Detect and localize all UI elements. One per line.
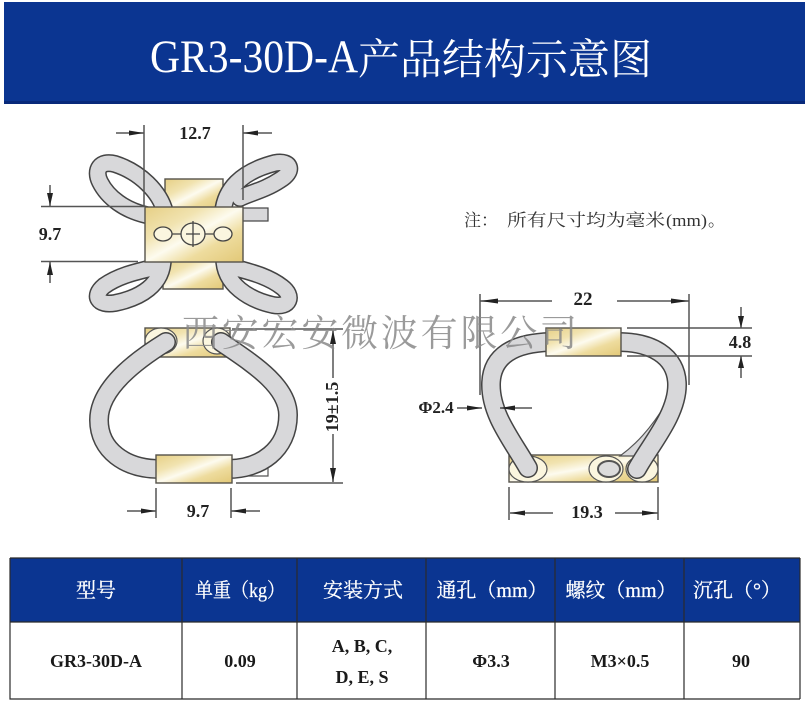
table row: A, B, C, (332, 636, 392, 656)
watermark: 西安宏安微波有限公司 (182, 313, 577, 355)
bottom block (509, 455, 658, 482)
dimension: 12.7: 12.7 (179, 123, 211, 143)
front block (145, 207, 243, 262)
dimension: 22: 22 (574, 289, 592, 310)
note text: 。 (708, 211, 725, 230)
spec table (10, 558, 800, 699)
dimension: Φ2.4 (418, 398, 532, 417)
small rod tail (232, 467, 268, 476)
table header: 螺纹（mm） (565, 579, 677, 602)
diagram: side view left (99, 328, 288, 483)
table row (10, 622, 800, 699)
back block (165, 179, 223, 209)
dimension: 19±1.5 (232, 329, 343, 483)
bottom holes (509, 456, 658, 482)
dimension: bottom 9.7 (127, 488, 260, 521)
tube loops (98, 163, 289, 305)
table row: M3×0.5 (591, 651, 649, 671)
tube (491, 342, 677, 469)
note text: 注： (464, 211, 498, 230)
table row: 90 (732, 651, 750, 671)
rear tube (620, 402, 671, 456)
table header: 通孔（mm） (436, 579, 548, 602)
note text: (mm) (666, 211, 707, 230)
dimension: 4.8: 4.8 (729, 332, 751, 352)
right rod (240, 208, 268, 221)
dimension: 19.3 (509, 487, 658, 522)
table header: 单重（kg） (195, 579, 285, 602)
top block (546, 328, 621, 356)
table header: 安装方式 (323, 579, 403, 602)
dimension: 19.3: 19.3 (571, 502, 603, 522)
dimension: 9.7 height: 9.7 (39, 224, 61, 244)
bottom block (156, 455, 232, 483)
dimension: bottom 9.7: 9.7 (187, 501, 209, 521)
dimension: 19±1.5: 19±1.5 (322, 382, 342, 432)
dimension: 22 (480, 289, 689, 395)
note text (464, 211, 725, 230)
table row: D, E, S (335, 667, 389, 687)
dimension: 12.7 (116, 123, 272, 207)
table header (10, 558, 800, 622)
table row: 0.09 (224, 651, 256, 671)
note text: 所有尺寸均为毫米 (507, 211, 665, 230)
table header: 沉孔（°） (693, 579, 781, 602)
dimension: 4.8 (627, 307, 752, 378)
header banner (4, 2, 805, 104)
dimension: 9.7 height (39, 185, 144, 283)
dimension: Φ2.4: Φ2.4 (418, 398, 454, 417)
diagram: top view (98, 163, 289, 305)
tube (99, 342, 288, 469)
diagram: side view right (491, 328, 677, 482)
title: GR3-30D-A (150, 31, 358, 83)
top block (145, 328, 230, 357)
title (150, 31, 652, 84)
title: 产品结构示意图 (358, 37, 652, 84)
table row: Φ3.3 (472, 651, 510, 671)
table row: GR3-30D-A (50, 651, 142, 671)
mounting holes (154, 221, 232, 247)
table header: 型号 (76, 579, 116, 602)
top holes (145, 328, 177, 354)
